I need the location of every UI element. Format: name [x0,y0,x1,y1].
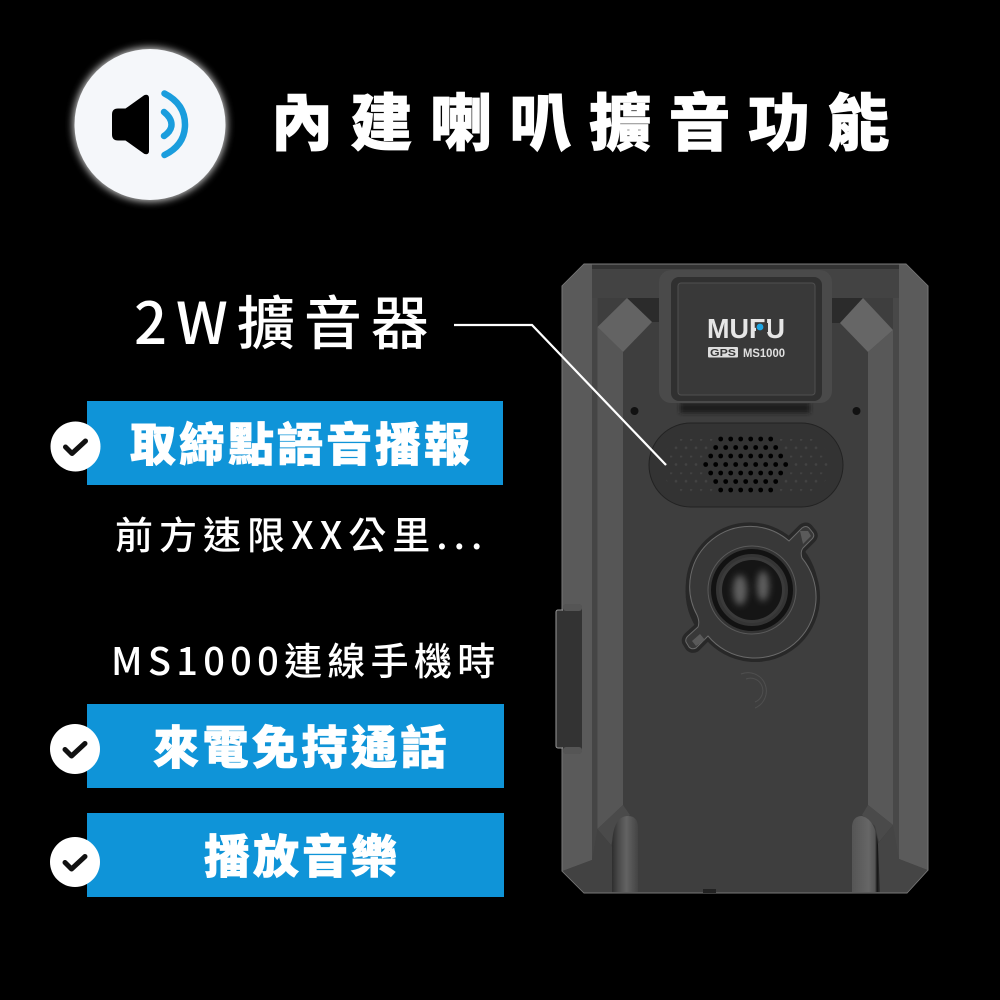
heading: 2W amplifier: 2W擴音器 [134,277,438,361]
left inner strip [598,327,623,829]
feature bar: enforcement voice alerts: 取締點語音播報 [130,409,473,475]
feature bar: music playback [87,813,504,897]
badge: GPS: GPS [710,348,736,359]
logo: MUFU: MUFU [707,313,785,344]
callout line [454,325,666,465]
right groove [893,298,899,859]
right post [852,816,880,892]
top edge shade [592,265,899,269]
side button [556,604,582,754]
text: phone connection note: MS1000連線手機時 [111,631,501,686]
left post [612,816,638,892]
right bottom chamfer [862,805,893,842]
embossed ring [741,673,766,708]
icon: check 1 [50,422,100,472]
model name: MS1000 [743,346,785,360]
text: speed limit example: 前方速限XX公里... [115,505,488,560]
icon: check 2 [50,724,100,774]
left diamond [598,298,652,352]
left groove [592,298,598,860]
device top band [592,265,899,298]
feature bar: hands-free calling: 來電免持通話 [153,712,450,778]
feature bar: enforcement voice alerts [87,401,503,485]
right inner strip [868,330,893,825]
badge: GPS [708,347,738,359]
left outer strip [562,264,592,871]
icon: check 3 [50,837,100,887]
camera module [659,270,832,413]
speaker grille [649,423,843,507]
left shoulder shadow [627,298,660,322]
left bottom chamfer [598,805,630,845]
icon: speaker badge [73,48,227,202]
bottom notch [703,889,716,893]
right screw [852,407,860,415]
bottom right corner [877,825,928,892]
right diamond [840,298,893,352]
feature bar: hands-free calling [87,704,504,788]
device: MS1000 rear view [556,264,928,893]
left screw [630,407,638,415]
bottom left corner [562,829,613,892]
right outer strip [899,264,928,870]
mount: ball joint [686,525,818,658]
right shoulder shadow [832,298,863,323]
feature bar: music playback: 播放音樂 [204,821,400,887]
title: 內建喇叭擴音功能 [271,73,907,163]
